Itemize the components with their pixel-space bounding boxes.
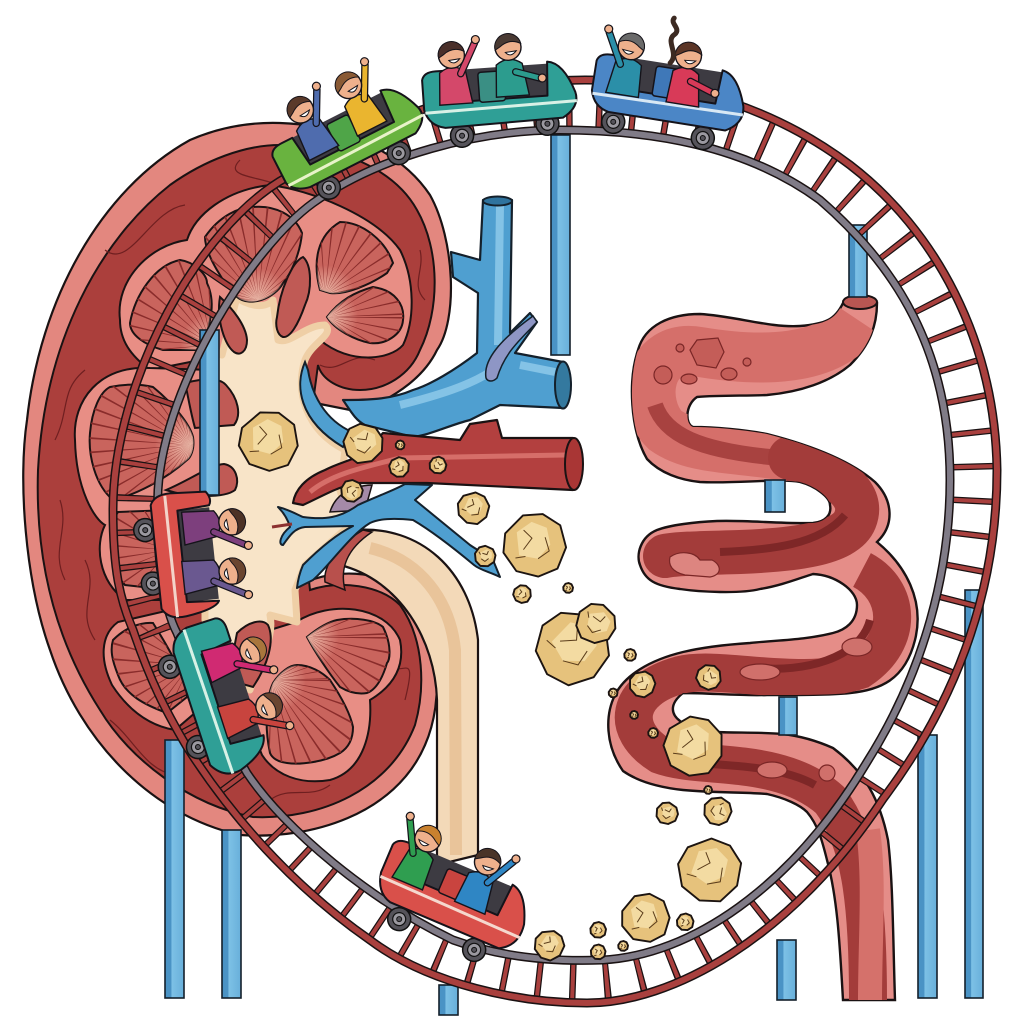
ureter — [340, 530, 478, 865]
small pyramid behind teal car — [228, 622, 271, 687]
vein highlight — [400, 205, 555, 405]
coaster track — [113, 80, 997, 1003]
artery opening — [565, 438, 583, 490]
cortex vessel squiggles — [55, 160, 425, 800]
pyramid upper left — [129, 259, 213, 351]
small pyramid beside track — [219, 297, 247, 354]
inner grey rail — [157, 130, 950, 960]
kidney cross-section — [23, 123, 451, 836]
ureter inner stripe — [370, 548, 456, 855]
track ties — [135, 105, 974, 982]
vein curve at hilum — [300, 362, 352, 447]
pyramid top right — [316, 221, 394, 294]
kidney stones — [233, 405, 754, 966]
pyramid right — [326, 286, 404, 344]
renal pelvis — [205, 297, 350, 690]
tube opening — [843, 295, 877, 309]
winding tube — [608, 295, 918, 1000]
lower-left pink lobe — [104, 610, 210, 730]
pyramid lower right — [306, 618, 391, 694]
vein top opening — [483, 196, 512, 206]
pyramid low-mid — [166, 464, 237, 496]
tube lumen — [634, 320, 892, 1000]
pyramid behind red car — [110, 510, 156, 588]
outer red rail — [113, 80, 997, 1003]
purple vessel — [486, 316, 537, 381]
vein right opening — [555, 362, 571, 408]
lower-right pink lobe — [240, 609, 401, 781]
pyramid bottom — [266, 664, 354, 765]
pyramid left — [88, 384, 194, 498]
pyramid mid — [185, 379, 238, 428]
teal coaster car — [419, 29, 580, 150]
lower renal vein branches — [272, 484, 500, 588]
renal artery — [293, 420, 583, 505]
left pink lobes — [75, 368, 212, 600]
kidney red cortex — [38, 145, 435, 817]
dark plume of hair — [666, 18, 679, 63]
blue coaster car — [585, 7, 756, 155]
blue support pillars — [165, 135, 983, 1015]
red coaster car on left of loop — [130, 485, 259, 621]
pyramid top centre — [204, 206, 303, 303]
purple vessel at hilum — [330, 485, 372, 512]
artery highlight — [310, 455, 565, 492]
tube lesions — [654, 338, 872, 781]
small red vessel beside lower vein — [325, 530, 372, 590]
teal coaster car lower left — [149, 605, 304, 785]
small red vessel fork — [272, 524, 292, 527]
kidney outer capsule — [23, 123, 451, 836]
pyramid lower left — [110, 622, 188, 712]
red coaster car at bottom — [362, 809, 549, 976]
renal vein, upper branch — [343, 196, 571, 437]
upper pink lobes — [120, 185, 412, 370]
green coaster car — [251, 45, 439, 215]
pyramid sliver — [276, 257, 310, 337]
